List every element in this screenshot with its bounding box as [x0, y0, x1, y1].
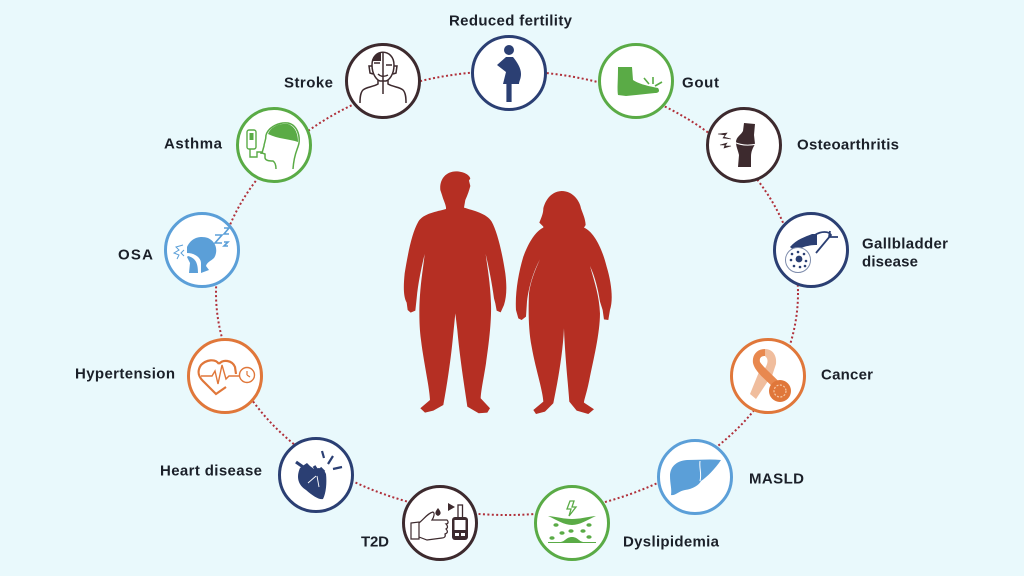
label: Gallbladder disease [862, 236, 948, 270]
icon: gallbladder [774, 214, 848, 286]
icon: cancer ribbon [732, 340, 804, 412]
female body silhouette [516, 191, 612, 414]
icon: hand and glucose meter [404, 486, 476, 560]
label: T2D: T2D [361, 534, 389, 550]
icon: blocked artery with lipids [536, 486, 608, 560]
label: OSA: OSA [118, 246, 153, 264]
label: Gout: Gout [682, 74, 719, 92]
label: Stroke: Stroke [284, 74, 333, 92]
icon: foot with gout [600, 44, 672, 118]
male body silhouette [404, 171, 506, 413]
label: Asthma: Asthma [164, 136, 223, 152]
label: Gallbladder disease: disease [862, 254, 918, 270]
label: Cancer: Cancer [821, 366, 873, 384]
icon: head with inhaler [238, 108, 310, 182]
label: Heart disease: Heart disease [160, 462, 262, 480]
icon: liver [658, 440, 732, 514]
icon: heart [280, 438, 352, 512]
icon: pregnant woman [472, 36, 546, 110]
label: Dyslipidemia: Dyslipidemia [623, 534, 720, 550]
label: Gallbladder disease: Gallbladder [862, 236, 948, 252]
icon: stroke face [346, 44, 420, 118]
icon: sleep apnea head [166, 214, 238, 286]
label: Reduced fertility: Reduced fertility [449, 12, 573, 30]
label: MASLD: MASLD [749, 470, 804, 488]
label: Hypertension: Hypertension [75, 366, 175, 382]
icon: knee joint [708, 108, 780, 182]
label: Osteoarthritis: Osteoarthritis [797, 136, 899, 154]
icon: heart pulse and gauge [188, 340, 262, 412]
